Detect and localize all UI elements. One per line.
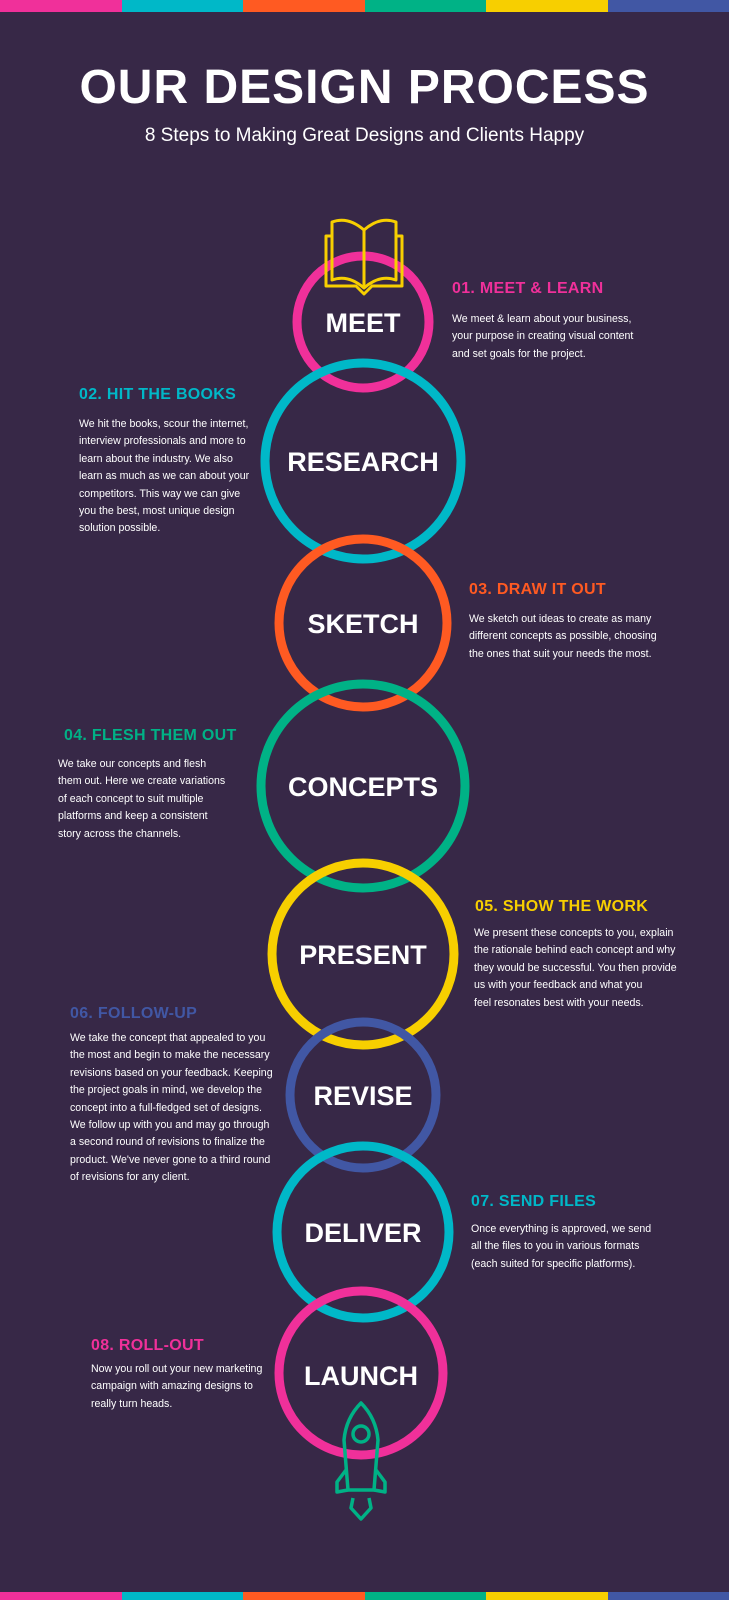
label: concepts: CONCEPTS [288,772,438,802]
step 02 text: learn about the industry. We also [79,453,233,465]
icon: rocket [337,1403,385,1519]
step 06 text [70,1032,273,1183]
bottom color bar [0,1592,729,1600]
step 05 text: the rationale behind each concept and why [474,944,675,956]
step 08 text [91,1363,262,1410]
step 04 heading: 04. FLESH THEM OUT [64,727,237,744]
step 03 text: the ones that suit your needs the most. [469,648,652,660]
step 08 text: campaign with amazing designs to [91,1380,253,1392]
step 08 text: really turn heads. [91,1398,172,1410]
step 07 text [471,1223,651,1270]
step 04 text: them out. Here we create variations [58,775,225,787]
step 06 text: the most and begin to make the necessary [70,1049,270,1061]
step 02 text: competitors. This way we can give [79,488,240,500]
step 07 text: Once everything is approved, we send [471,1223,651,1235]
step 03 text: We sketch out ideas to create as many [469,613,651,625]
ring: present [272,863,454,1045]
step 07 text: all the files to you in various formats [471,1240,639,1252]
step 06 text: We take the concept that appealed to you [70,1032,265,1044]
step 06 text: revisions based on your feedback. Keeping [70,1067,273,1079]
step 02 text: solution possible. [79,522,160,534]
label: revise: REVISE [313,1081,413,1111]
step 02 text: We hit the books, scour the internet, [79,418,248,430]
step 03 text: different concepts as possible, choosing [469,630,657,642]
step 01 heading: 01. MEET & LEARN [452,280,604,297]
step 02 text [79,418,249,534]
step 05 text: feel resonates best with your needs. [474,997,644,1009]
label: sketch: SKETCH [307,609,419,639]
subtitle: 8 Steps to Making Great Designs and Clients Happy [145,125,584,146]
step 02 text: interview professionals and more to [79,435,246,447]
step 04 text: platforms and keep a consistent [58,810,208,822]
label: launch: LAUNCH [304,1361,418,1391]
step 07 text: (each suited for specific platforms). [471,1258,635,1270]
step 02 heading: 02. HIT THE BOOKS [79,386,236,403]
step 08 text: Now you roll out your new marketing [91,1363,262,1375]
step 05 text: We present these concepts to you, explain [474,927,673,939]
step 03 heading: 03. DRAW IT OUT [469,581,606,598]
step 04 text: of each concept to suit multiple [58,793,203,805]
step 06 text: the project goals in mind, we develop the [70,1084,262,1096]
ring: launch [279,1291,443,1455]
step 06 text: concept into a full-fledged set of designs. [70,1102,262,1114]
step 04 text [58,758,225,840]
step 01 text [452,313,634,360]
ring: research [265,363,461,559]
label: research: RESEARCH [287,447,439,477]
step 02 text: you the best, most unique design [79,505,234,517]
step 02 text: learn as much as we can about your [79,470,249,482]
top color bar [0,0,729,12]
step 05 heading: 05. SHOW THE WORK [475,898,648,915]
label: deliver: DELIVER [304,1218,422,1248]
step 04 text: We take our concepts and flesh [58,758,206,770]
step 07 heading: 07. SEND FILES [471,1193,596,1210]
ring: revise [290,1022,436,1168]
ring: sketch [279,539,447,707]
step 05 text: they would be successful. You then provide [474,962,677,974]
ring: deliver [277,1146,449,1318]
step 06 text: of revisions for any client. [70,1171,190,1183]
step 06 text: product. We've never gone to a third round [70,1154,270,1166]
step 01 text: We meet & learn about your business, [452,313,631,325]
step 03 text [469,613,657,660]
ring: concepts [261,684,465,888]
step 01 text: your purpose in creating visual content [452,330,633,342]
step 05 text: us with your feedback and what you [474,979,642,991]
ring: meet [297,256,429,388]
step 06 heading: 06. FOLLOW-UP [70,1005,197,1022]
label: present: PRESENT [299,940,427,970]
label: meet: MEET [325,308,401,338]
icon: book [326,220,402,294]
step 06 text: a second round of revisions to finalize the [70,1136,265,1148]
title: OUR DESIGN PROCESS [79,61,650,114]
step 08 heading: 08. ROLL-OUT [91,1337,204,1354]
step 05 text [474,927,677,1009]
step 04 text: story across the channels. [58,828,181,840]
step 01 text: and set goals for the project. [452,348,586,360]
step 06 text: We follow up with you and may go through [70,1119,269,1131]
